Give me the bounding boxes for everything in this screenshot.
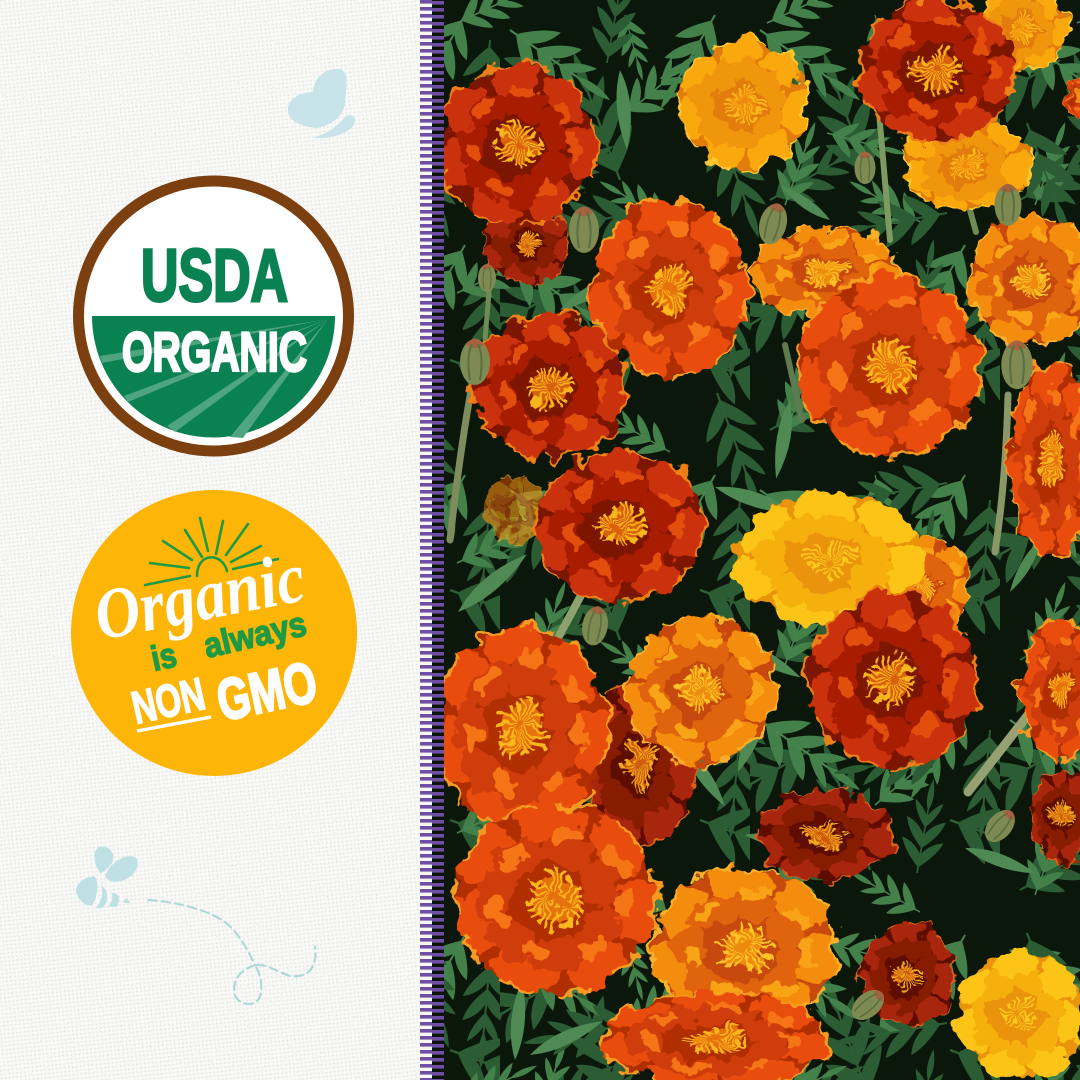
flower: [475, 313, 625, 459]
flower buds: [460, 152, 1033, 1026]
flower: [593, 200, 747, 376]
flower: [1009, 362, 1080, 558]
flower: [653, 867, 837, 1029]
dashed flight path: [148, 900, 315, 1004]
flower: [808, 592, 978, 768]
flower: [750, 227, 900, 317]
flower: [1020, 620, 1080, 760]
foliage background: [432, 0, 1080, 1080]
bee wings: [76, 846, 138, 908]
flower: [757, 790, 893, 880]
purple stitched stripe divider: [420, 0, 444, 1080]
flower: [535, 451, 705, 601]
word: GMO: GMO: [211, 649, 323, 734]
flower: [798, 276, 982, 456]
icon: green rising sun: [145, 518, 278, 585]
icon: butterfly: [288, 69, 355, 138]
yellow circle: [71, 490, 357, 776]
flower: [1065, 77, 1080, 119]
brown ring: [78, 181, 348, 451]
flower: [736, 494, 924, 626]
underline: [137, 717, 211, 731]
flower stems: [450, 100, 1080, 792]
flower: [679, 39, 807, 167]
heading: USDA: USDA: [141, 234, 288, 317]
flower: [858, 0, 1016, 143]
green half disk with field rays: [92, 316, 335, 438]
flower: [436, 625, 608, 831]
heading: ORGANIC: ORGANIC: [122, 320, 307, 383]
flower: [627, 617, 777, 763]
broad leaves: [453, 69, 1045, 1061]
flower: [487, 474, 543, 546]
badge: USDA Organic seal: [78, 181, 348, 451]
flower: [584, 685, 696, 845]
flower: [1028, 768, 1080, 862]
flower: [977, 0, 1067, 73]
flower: [904, 535, 971, 624]
panel: white linen background: [0, 0, 432, 1080]
flower: [906, 116, 1030, 214]
flower: [968, 214, 1080, 346]
flower: [439, 64, 597, 226]
flower: [861, 924, 955, 1026]
script word: Organic: Organic: [88, 537, 311, 656]
word: always: always: [200, 604, 310, 666]
marigold blooms: [436, 0, 1080, 1080]
icon: bee with dashed flight path: [76, 846, 315, 1004]
word: NON: NON: [127, 667, 209, 734]
flower: [957, 952, 1080, 1078]
badge: Organic is always non GMO: [71, 490, 357, 776]
photo: marigold flowers and foliage: [432, 0, 1080, 1080]
word: is: is: [148, 635, 180, 679]
flower: [602, 991, 828, 1080]
flower: [488, 207, 572, 283]
flower: [454, 804, 658, 996]
